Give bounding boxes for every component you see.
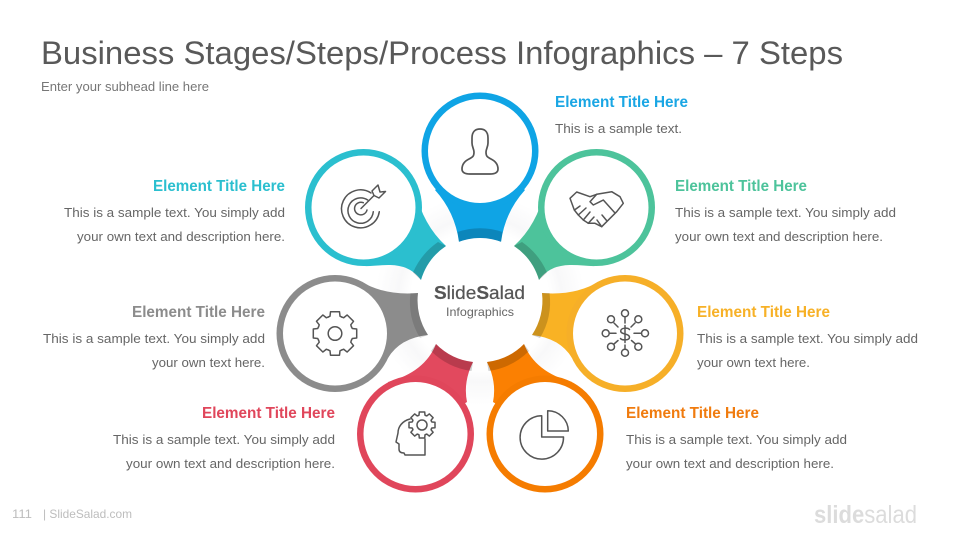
petal: orange step 4 bbox=[486, 344, 604, 492]
petal: blue step 1 bbox=[422, 92, 538, 242]
petal: yellow step 3 bbox=[532, 275, 684, 392]
hub brand name: SlideSalad bbox=[434, 283, 525, 303]
icon: gear bbox=[313, 312, 357, 355]
text block: orange step: This is a sample text. You simply add bbox=[626, 433, 847, 447]
hub subtitle: Infographics bbox=[446, 305, 514, 319]
text block: green step: Element Title Here bbox=[675, 178, 807, 195]
text block: green step bbox=[675, 178, 896, 244]
text block: blue step bbox=[555, 94, 688, 136]
text block: red step: Element Title Here bbox=[202, 405, 335, 422]
text block: orange step: your own text and description here. bbox=[626, 457, 834, 471]
footer logo: slidesalad bbox=[814, 501, 917, 529]
text block: teal step bbox=[64, 178, 285, 244]
footer page number and site: 111 bbox=[12, 507, 32, 521]
petal: teal step 7 bbox=[305, 149, 446, 280]
text block: teal step: Element Title Here bbox=[153, 178, 285, 195]
icon: head with gear bbox=[396, 412, 435, 455]
icon: pie chart bbox=[520, 411, 568, 459]
text block: yellow step: Element Title Here bbox=[697, 304, 830, 321]
icon: dollar network bbox=[602, 310, 648, 356]
text block: teal step: This is a sample text. You simply add bbox=[64, 206, 285, 220]
text block: green step: This is a sample text. You simply add bbox=[675, 206, 896, 220]
text block: yellow step: your own text here. bbox=[697, 356, 810, 370]
petal: gray step 6 bbox=[276, 275, 428, 392]
petal: green step 2 bbox=[514, 149, 655, 280]
text block: gray step: This is a sample text. You simply add bbox=[43, 332, 265, 346]
text block: orange step bbox=[626, 405, 847, 471]
icon: person bbox=[462, 129, 498, 174]
icon: target with arrow bbox=[342, 185, 386, 228]
text block: gray step: your own text here. bbox=[152, 356, 265, 370]
center glow bbox=[375, 195, 585, 405]
footer page number and site: | SlideSalad.com bbox=[43, 507, 132, 521]
text block: blue step: This is a sample text. bbox=[555, 122, 682, 136]
text block: red step: This is a sample text. You simply add bbox=[113, 433, 335, 447]
text block: orange step: Element Title Here bbox=[626, 405, 759, 422]
text block: yellow step: This is a sample text. You simply add bbox=[697, 332, 918, 346]
subhead: Enter your subhead line here bbox=[41, 80, 209, 94]
center hub bbox=[418, 238, 542, 362]
text block: gray step: Element Title Here bbox=[132, 304, 265, 321]
title: Business Stages/Steps/Process Infographics – 7 Steps bbox=[41, 35, 843, 71]
petal: red step 5 bbox=[357, 344, 474, 492]
icon: handshake bbox=[570, 192, 623, 227]
text block: gray step bbox=[43, 304, 265, 370]
text block: teal step: your own text and description here. bbox=[77, 230, 285, 244]
text block: red step: your own text and description here. bbox=[126, 457, 335, 471]
text block: yellow step bbox=[697, 304, 918, 370]
text block: red step bbox=[113, 405, 335, 471]
text block: green step: your own text and description here. bbox=[675, 230, 883, 244]
text block: blue step: Element Title Here bbox=[555, 94, 688, 111]
